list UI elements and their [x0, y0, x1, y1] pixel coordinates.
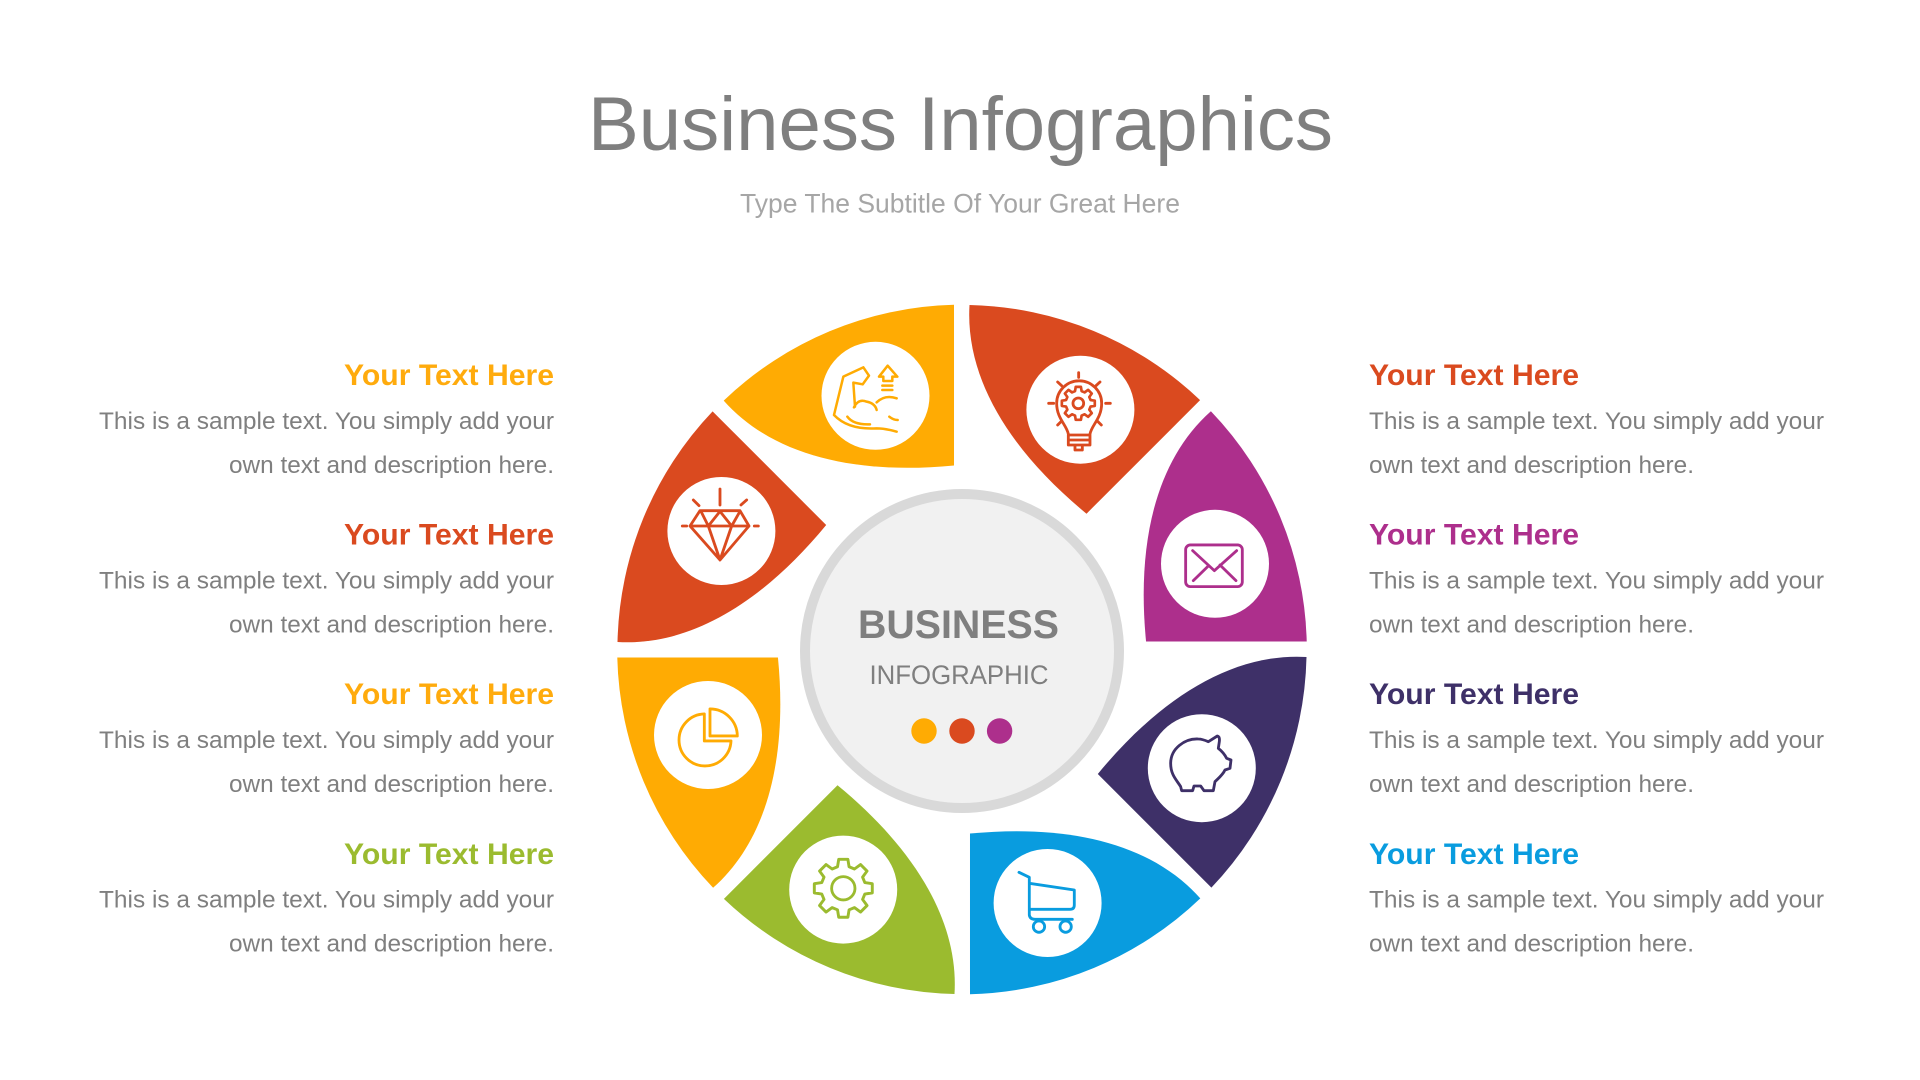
right text block 2: Your Text Here: [1369, 518, 1579, 552]
right text block 3: [1369, 678, 1824, 798]
right text block 1: This is a sample text. You simply add your: [1369, 408, 1824, 435]
left text block 4: [99, 838, 554, 958]
segment: bottom blue with shopping cart icon: [890, 751, 1201, 1061]
right text block 2: [1369, 518, 1824, 638]
icon: shopping cart: [1019, 872, 1074, 932]
left text block 4: own text and description here.: [229, 930, 554, 958]
segment: right purple with envelope icon: [1063, 411, 1374, 722]
right text block 1: [1369, 359, 1824, 479]
center subheading: INFOGRAPHIC: [870, 660, 1048, 690]
segment: left orange with pie chart icon: [550, 577, 861, 888]
left text block 2: This is a sample text. You simply add your: [99, 568, 554, 594]
icon: diamond: [682, 489, 758, 560]
right text block 2: This is a sample text. You simply add your: [1369, 568, 1824, 594]
right text block 3: Your Text Here: [1369, 678, 1579, 711]
left text block 2: own text and description here.: [229, 612, 554, 638]
left text block 1: Your Text Here: [344, 359, 554, 392]
left text block 1: own text and description here.: [229, 452, 554, 479]
right text block 4: Your Text Here: [1369, 838, 1579, 871]
right text block 3: own text and description here.: [1369, 771, 1694, 798]
left text block 4: Your Text Here: [344, 838, 554, 871]
right text block 4: own text and description here.: [1369, 930, 1694, 958]
left text block 1: [99, 359, 554, 479]
right text block 4: [1369, 838, 1824, 958]
icon: lightbulb with gear: [1049, 373, 1110, 450]
left text block 3: own text and description here.: [229, 771, 554, 798]
segment: bottom green with gear icon: [724, 785, 955, 994]
segment: top-right red with lightbulb icon: [969, 305, 1200, 514]
icon: flexed arm with arrow: [834, 366, 898, 432]
center heading: BUSINESS: [858, 603, 1059, 647]
left text block 3: This is a sample text. You simply add your: [99, 727, 554, 754]
center circle: [805, 494, 1119, 808]
title: Business Infographics: [588, 82, 1333, 167]
left text block 4: This is a sample text. You simply add your: [99, 886, 554, 914]
segment: top-left orange with flexed arm icon: [723, 238, 1034, 548]
right text block 2: own text and description here.: [1369, 612, 1694, 638]
icon: pie chart: [679, 709, 737, 766]
three coloured dots: [911, 718, 1012, 744]
left text block 2: [99, 518, 554, 638]
right text block 1: own text and description here.: [1369, 452, 1694, 479]
left text block 3: Your Text Here: [344, 678, 554, 711]
icon: piggy bank: [1171, 736, 1231, 791]
icon: gear: [814, 859, 872, 917]
left text block 3: [99, 678, 554, 798]
icon: envelope: [1186, 545, 1242, 587]
right text block 1: Your Text Here: [1369, 359, 1579, 392]
segment: upper-left red with diamond icon: [618, 411, 826, 642]
segment: lower-right navy with piggy bank icon: [1098, 657, 1306, 888]
left text block 2: Your Text Here: [344, 518, 554, 552]
right text block 4: This is a sample text. You simply add your: [1369, 886, 1824, 914]
subtitle: Type The Subtitle Of Your Great Here: [740, 188, 1180, 218]
left text block 1: This is a sample text. You simply add your: [99, 408, 554, 435]
right text block 3: This is a sample text. You simply add your: [1369, 727, 1824, 754]
